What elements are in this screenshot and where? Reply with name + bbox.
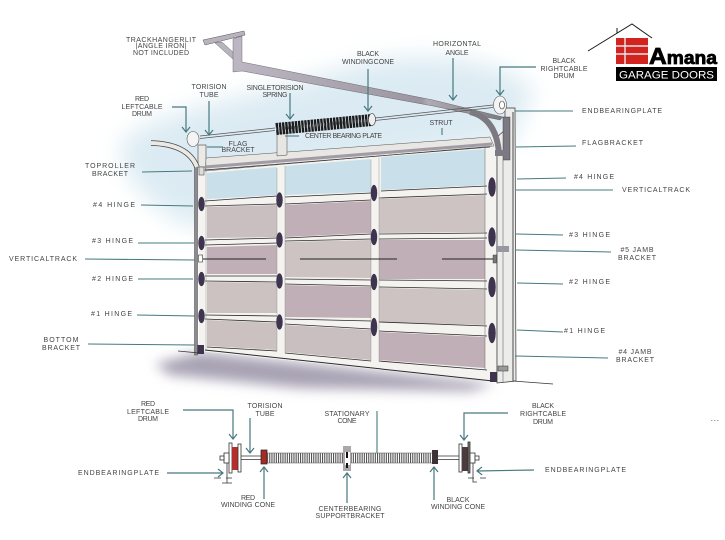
top roller and lower brackets xyxy=(197,167,497,382)
label: torsion tube: TUBE xyxy=(200,92,219,99)
label: torsion tube: TORISION xyxy=(192,84,226,91)
label: vertical track right: VERTICALTRACK xyxy=(622,187,690,194)
center bearing support bracket xyxy=(343,446,351,471)
label: #4 jamb bracket: #4 JAMB xyxy=(618,349,652,356)
label: black winding cone: WINDINGCONE xyxy=(342,59,394,66)
left vertical track xyxy=(178,165,199,355)
label: top roller bracket: BRACKET xyxy=(92,171,129,178)
label: black winding cone lower: BLACK xyxy=(446,497,470,504)
label: #3 hinge right xyxy=(516,232,610,239)
label: #1 hinge left xyxy=(91,311,195,318)
label: #3 hinge left xyxy=(92,238,194,245)
shaft right xyxy=(438,456,459,460)
track hanger angle iron xyxy=(203,31,503,120)
cable drums xyxy=(187,96,506,146)
label: lower end bearing plate right: ENDBEARINGPLATE xyxy=(545,467,626,474)
label: lower black right cable drum: BLACK xyxy=(532,403,554,410)
floor shadow xyxy=(155,352,495,391)
label: red left cable drum: DRUM xyxy=(132,111,152,118)
label: track hanger: TRACKHANGERLIT xyxy=(126,37,197,44)
label: #2 hinge left: #2 HINGE xyxy=(92,276,133,283)
label: single torsion spring: SINGLETORISION xyxy=(246,85,304,92)
label: #4 jamb bracket xyxy=(515,349,655,364)
small stray mark xyxy=(711,420,718,422)
glass panes xyxy=(207,149,485,199)
label: lower torsion tube xyxy=(248,403,282,453)
label: bottom bracket: BRACKET xyxy=(42,345,81,352)
label: black right cable drum: DRUM xyxy=(554,73,575,80)
lower panels xyxy=(207,195,485,368)
logo: Amana Garage Doors: GARAGE DOORS xyxy=(619,70,714,82)
red winding cone xyxy=(261,450,267,464)
left curved track xyxy=(151,143,197,167)
label: red left cable drum: RED xyxy=(135,96,149,103)
label: lower black right cable drum: DRUM xyxy=(533,419,553,426)
label: black right cable drum xyxy=(500,58,588,95)
label: track hanger xyxy=(126,37,197,57)
label: #2 hinge right xyxy=(517,279,610,286)
label: single torsion spring: SPRING xyxy=(262,92,288,99)
center bearing post xyxy=(277,133,287,156)
black right cable drum xyxy=(459,444,468,472)
label: #3 hinge left: #3 HINGE xyxy=(92,238,133,245)
label: #1 hinge right: #1 HINGE xyxy=(564,328,605,335)
door stile flag bracket left xyxy=(198,145,206,167)
door body xyxy=(197,135,497,382)
label: center bearing support bracket xyxy=(316,473,385,520)
label: lower red left cable drum: LEFTCABLE xyxy=(127,409,169,416)
strut xyxy=(205,137,494,171)
label: lower red left cable drum: DRUM xyxy=(138,416,158,423)
label: strut xyxy=(430,120,453,135)
label: #4 hinge right xyxy=(517,174,614,181)
label: horizontal angle: HORIZONTAL xyxy=(433,41,481,48)
label: black winding cone xyxy=(342,51,394,111)
label: red left cable drum: LEFTCABLE xyxy=(122,104,163,111)
sky background xyxy=(120,57,535,228)
torsion tube xyxy=(200,105,493,138)
label: torsion tube xyxy=(192,84,226,135)
label: #4 hinge right: #4 HINGE xyxy=(574,174,614,181)
label: #4 hinge left: #4 HINGE xyxy=(93,202,135,209)
label: #4 hinge left xyxy=(93,202,193,209)
label: flag bracket right: FLAGBRACKET xyxy=(582,140,644,147)
label: black right cable drum: RIGHTCABLE xyxy=(540,66,588,73)
label: lower red left cable drum xyxy=(127,401,233,439)
label: black right cable drum: BLACK xyxy=(552,58,576,65)
shaft left xyxy=(241,456,261,460)
label: flag bracket left xyxy=(207,141,255,154)
label: red winding cone: WINDING CONE xyxy=(221,502,275,509)
label: end bearing plate: ENDBEARINGPLATE xyxy=(582,108,662,115)
label: center bearing support bracket: CENTERBEARING xyxy=(318,506,382,513)
label: #5 jamb bracket xyxy=(516,247,657,262)
label: black winding cone: BLACK xyxy=(357,51,379,58)
label: lower torsion tube: TUBE xyxy=(256,411,275,418)
label: flag bracket left: BRACKET xyxy=(222,147,255,154)
label: horizontal angle xyxy=(433,41,481,100)
lower spring assembly diagram xyxy=(214,442,486,483)
label: bottom bracket: BOTTOM xyxy=(44,337,79,344)
label: #1 hinge left: #1 HINGE xyxy=(91,311,132,318)
torsion spring xyxy=(276,114,376,129)
hinges xyxy=(198,178,496,343)
label: #5 jamb bracket: #5 JAMB xyxy=(620,247,654,254)
label: top roller bracket: TOPROLLER xyxy=(85,163,135,170)
label: #4 jamb bracket: BRACKET xyxy=(616,357,655,364)
label: #5 jamb bracket: BRACKET xyxy=(618,255,657,262)
label: bottom bracket xyxy=(42,337,195,352)
label: #1 hinge right xyxy=(517,328,605,335)
label: lower red left cable drum: RED xyxy=(141,401,155,408)
label: strut: STRUT xyxy=(430,120,453,127)
label: lower black right cable drum xyxy=(464,403,566,440)
black winding cone xyxy=(432,450,438,464)
red left cable drum xyxy=(232,444,241,472)
label: single torsion spring xyxy=(246,85,304,119)
right flag bracket and curved horizontal track xyxy=(470,112,510,160)
label: lower torsion tube: TORISION xyxy=(248,403,282,410)
label: center bearing plate: CENTER BEARING PLATE xyxy=(305,133,382,140)
label: red left cable drum xyxy=(122,96,186,132)
label: #3 hinge right: #3 HINGE xyxy=(569,232,610,239)
logo: Amana Garage Doors xyxy=(588,24,718,82)
label: top roller bracket xyxy=(85,163,192,178)
label: black winding cone lower xyxy=(431,467,485,511)
label: stationary cone xyxy=(324,411,377,453)
rail lines xyxy=(205,135,497,382)
label: track hanger: NOT INCLUDED xyxy=(133,50,189,57)
label: black winding cone lower: WINDING CONE xyxy=(431,504,485,511)
label: #2 hinge right: #2 HINGE xyxy=(569,279,610,286)
label: horizontal angle: ANGLE xyxy=(446,50,469,57)
label: flag bracket left: FLAG xyxy=(228,141,248,148)
right end bearing plate and stub xyxy=(468,442,486,482)
spring xyxy=(267,453,432,463)
horizontal black cable line xyxy=(203,258,493,260)
label: stationary cone: STATIONARY xyxy=(324,411,370,418)
label: stationary cone: CONE xyxy=(338,418,357,425)
label: center bearing support bracket: SUPPORTBRACKET xyxy=(316,513,385,520)
label: track hanger: |ANGLE IRON| xyxy=(136,43,187,50)
right jamb xyxy=(496,108,553,384)
label: red winding cone xyxy=(221,467,275,509)
label: #2 hinge left xyxy=(92,276,193,283)
label: flag bracket right xyxy=(516,140,644,147)
left end bearing plate and stub xyxy=(214,443,232,483)
label: red winding cone: RED xyxy=(241,495,255,502)
label: vertical track left: VERTICALTRACK xyxy=(9,256,77,263)
label: lower end bearing plate left: ENDBEARINGPLATE xyxy=(78,470,159,477)
label: lower black right cable drum: RIGHTCABLE xyxy=(520,411,566,418)
logo: Amana Garage Doors: Amana xyxy=(649,43,718,69)
